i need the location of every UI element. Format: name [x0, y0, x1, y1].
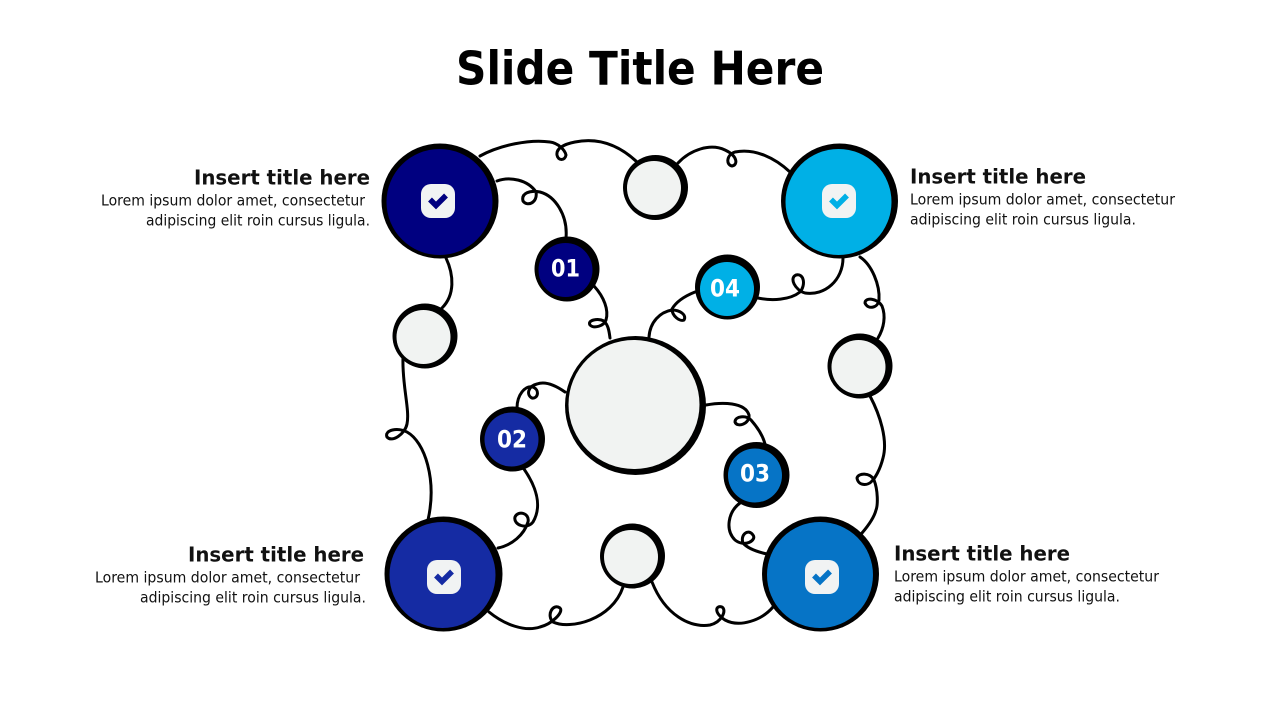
bottom-left large blue circle with check icon: [384, 516, 502, 632]
text block: top-right: Lorem ipsum dolor amet, consectetur: [910, 190, 1176, 208]
bottom-right large mid-blue circle with check icon: [762, 516, 879, 632]
icon: check badge: [805, 560, 839, 594]
bottom small grey circle: [600, 524, 665, 588]
text block: top-left: Lorem ipsum dolor amet, consectetur: [101, 192, 366, 210]
number circle 03: 03: [740, 460, 770, 488]
text block: top-left: [101, 166, 370, 230]
text block: bottom-left: Insert title here: [188, 542, 364, 566]
text block: bottom-right: [894, 542, 1160, 606]
text block: top-right: [910, 164, 1176, 228]
icon: check badge: [427, 560, 461, 594]
title: Slide Title Here: [456, 42, 824, 96]
left small grey circle: [392, 304, 458, 368]
text block: bottom-left: [95, 542, 366, 606]
number circle 03: [724, 442, 790, 508]
text block: bottom-left: adipiscing elit roin cursus ligula.: [140, 588, 366, 606]
icon: check badge: [822, 184, 856, 218]
top small grey circle: [623, 155, 688, 220]
text block: top-left: Insert title here: [194, 166, 370, 190]
number circle 02: [480, 406, 545, 472]
right small grey circle: [828, 334, 892, 398]
text block: bottom-left: Lorem ipsum dolor amet, consectetur: [95, 568, 361, 586]
number circle 02: 02: [497, 426, 527, 454]
top-right large light-blue circle with check icon: [781, 144, 898, 258]
icon: check badge: [421, 184, 455, 218]
text block: top-left: adipiscing elit roin cursus ligula.: [146, 212, 370, 230]
connectors: curly lines between circles: [387, 141, 885, 629]
number circle 01: 01: [551, 254, 580, 282]
text block: top-right: adipiscing elit roin cursus ligula.: [910, 210, 1136, 228]
text block: bottom-right: adipiscing elit roin cursus ligula.: [894, 588, 1120, 606]
number circle 04: 04: [710, 274, 740, 302]
top-left large navy circle with check icon: [382, 144, 498, 258]
text block: bottom-right: Lorem ipsum dolor amet, consectetur: [894, 568, 1160, 586]
number circle 01: [534, 236, 600, 302]
number circle 04: [695, 254, 760, 320]
central circle: [565, 336, 706, 475]
text block: top-right: Insert title here: [910, 164, 1086, 188]
text block: bottom-right: Insert title here: [894, 542, 1070, 566]
